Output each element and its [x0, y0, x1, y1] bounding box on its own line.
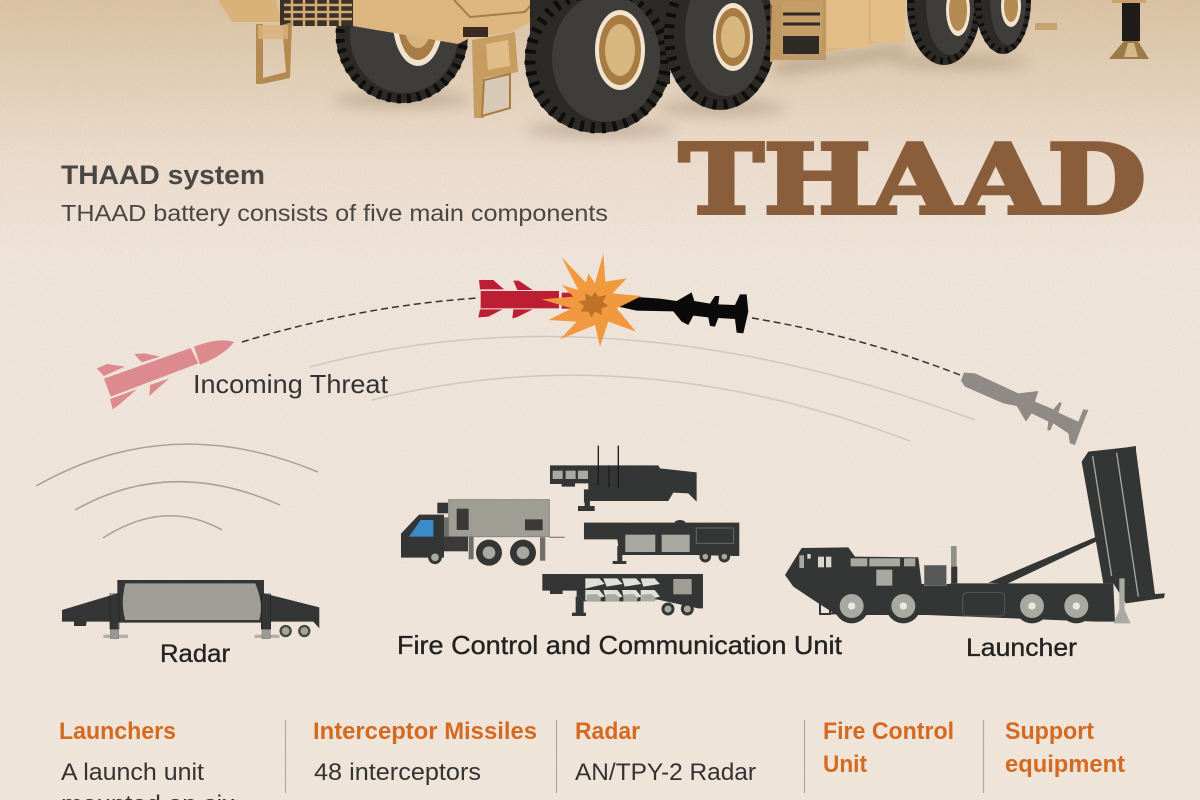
black interceptor missile: [618, 292, 748, 333]
title: THAAD: THAAD: [679, 124, 1146, 236]
column: fire control unit: [823, 718, 954, 778]
icon: launcher truck with raised canister: [785, 446, 1165, 623]
icon: fire control and communication vehicles: [401, 446, 739, 616]
interceptor dashed trajectory: [752, 318, 960, 375]
icon: incoming threat missile, pink: [97, 340, 234, 409]
lower trailer with missile canisters: [542, 574, 703, 616]
tan cab body and mesh grille: [218, 0, 542, 44]
truck centre panels: [770, 0, 1057, 62]
trajectory lines: [242, 298, 975, 441]
column: interceptor missiles: Interceptor Missiles: [313, 718, 537, 745]
explosion star: [542, 253, 642, 347]
raised missile canister: [1082, 446, 1165, 603]
label: incoming threat: Incoming Threat: [193, 369, 389, 399]
column: radar: [575, 718, 756, 786]
explosion core: [578, 292, 608, 317]
column: fire control unit: Fire Control: [823, 718, 954, 745]
stabiliser jack: [1109, 0, 1149, 59]
column: launchers: Launchers: [59, 718, 176, 745]
incoming dashed trajectory: [242, 298, 478, 342]
large tyres with hubs: [525, 0, 1031, 133]
front support leg: [256, 22, 518, 118]
column: support equipment: equipment: [1005, 751, 1125, 778]
column: launchers: A launch unit: [61, 759, 204, 786]
icon: radar waves: [36, 444, 318, 538]
heading: THAAD system: THAAD system: [61, 160, 265, 190]
icon: radar unit: [62, 580, 319, 639]
column: support equipment: [1005, 718, 1125, 778]
red threat missile: [478, 280, 578, 318]
ground shadow under truck: [332, 45, 1030, 137]
label: launcher: Launcher: [966, 634, 1077, 662]
column: support equipment: Support: [1005, 718, 1094, 745]
erector arm: [988, 537, 1098, 584]
rear wheel, partly hidden: [336, 0, 468, 103]
windows and panels: [799, 546, 957, 586]
column: radar: AN/TPY-2 Radar: [575, 759, 756, 786]
icon: interceptor missile, grey, launching: [961, 373, 1088, 445]
label: fire control and communication unit: Fire Control and Communication Unit: [397, 630, 843, 660]
rear stabiliser: [1113, 578, 1131, 623]
wheels: [834, 589, 1094, 623]
label: radar: Radar: [160, 640, 230, 668]
top trailer with antennas: [550, 446, 697, 511]
illustration: THAAD launcher truck on sand, cropped at top: [218, 0, 1149, 137]
middle trailer: [584, 520, 739, 564]
chassis and cab: [785, 547, 1115, 622]
panel: component list: [59, 718, 1125, 800]
command truck with shelter: [401, 500, 565, 563]
column: fire control unit: Unit: [823, 751, 867, 778]
column: interceptor missiles: 48 interceptors: [314, 759, 481, 786]
icon: red missile meeting interceptor: [478, 253, 748, 347]
column: radar: Radar: [575, 718, 640, 745]
subheading: THAAD battery consists of five main components: [61, 200, 608, 226]
background: sand gradient: [0, 0, 1200, 502]
faint arc two: [372, 375, 910, 441]
faint arc one: [310, 336, 975, 420]
column: launchers: [59, 718, 235, 800]
column: interceptor missiles: [313, 718, 537, 786]
